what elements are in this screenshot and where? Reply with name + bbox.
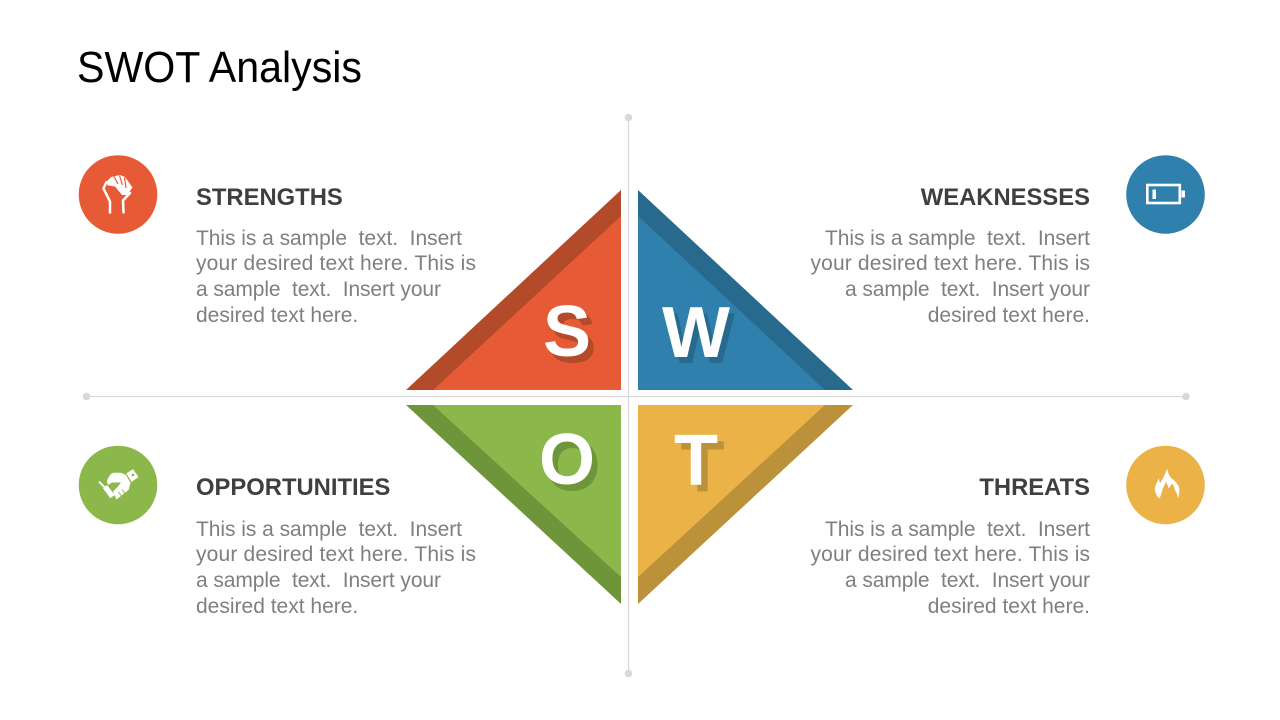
triangle: weaknesses: W: [662, 293, 730, 373]
text block: strengths: This is a sample text. Insert: [196, 227, 462, 250]
triangle: strengths: [406, 190, 621, 390]
text block: opportunities: your desired text here. This is: [196, 543, 476, 566]
heading: opportunities: OPPORTUNITIES: [196, 474, 390, 501]
triangle: threats: [638, 405, 853, 604]
text block: opportunities: [196, 518, 476, 618]
panel: opportunities: [196, 474, 476, 618]
icon: handshake: [79, 446, 157, 524]
triangle: strengths: S: [543, 292, 591, 372]
axis cross: [83, 114, 1190, 677]
text block: strengths: your desired text here. This is: [196, 252, 476, 275]
triangle: weaknesses: W: [667, 299, 735, 379]
icon: flame: [1126, 446, 1205, 524]
icon: battery: [1126, 155, 1205, 234]
heading: threats: THREATS: [979, 474, 1090, 501]
icon: fist: [79, 155, 157, 234]
triangle: threats: T: [674, 421, 718, 501]
triangle: strengths: S: [548, 298, 597, 378]
text block: threats: your desired text here. This is: [810, 543, 1090, 566]
triangle: weaknesses: [638, 190, 853, 390]
text block: weaknesses: This is a sample text. Insert: [825, 227, 1090, 250]
text block: threats: This is a sample text. Insert: [825, 518, 1090, 541]
text block: opportunities: a sample text. Insert your: [196, 569, 441, 592]
triangle: opportunities: O: [539, 420, 595, 500]
text block: weaknesses: [810, 227, 1090, 327]
title: SWOT Analysis: [77, 44, 362, 92]
panel: strengths: [196, 184, 476, 327]
text block: threats: desired text here.: [928, 595, 1090, 618]
heading: strengths: STRENGTHS: [196, 184, 343, 211]
text block: weaknesses: desired text here.: [928, 304, 1090, 327]
text block: weaknesses: your desired text here. This is: [810, 252, 1090, 275]
heading: weaknesses: WEAKNESSES: [921, 184, 1090, 211]
text block: strengths: desired text here.: [196, 304, 358, 327]
panel: threats: [810, 474, 1090, 618]
triangle: opportunities: O: [544, 426, 601, 506]
text block: strengths: [196, 227, 476, 327]
triangle: opportunities: [406, 405, 621, 604]
text block: weaknesses: a sample text. Insert your: [845, 278, 1090, 301]
text block: strengths: a sample text. Insert your: [196, 278, 441, 301]
text block: opportunities: This is a sample text. Insert: [196, 518, 462, 541]
text block: opportunities: desired text here.: [196, 595, 358, 618]
text block: threats: [810, 518, 1090, 618]
panel: weaknesses: [810, 184, 1090, 327]
triangle: threats: T: [680, 428, 724, 508]
text block: threats: a sample text. Insert your: [845, 569, 1090, 592]
